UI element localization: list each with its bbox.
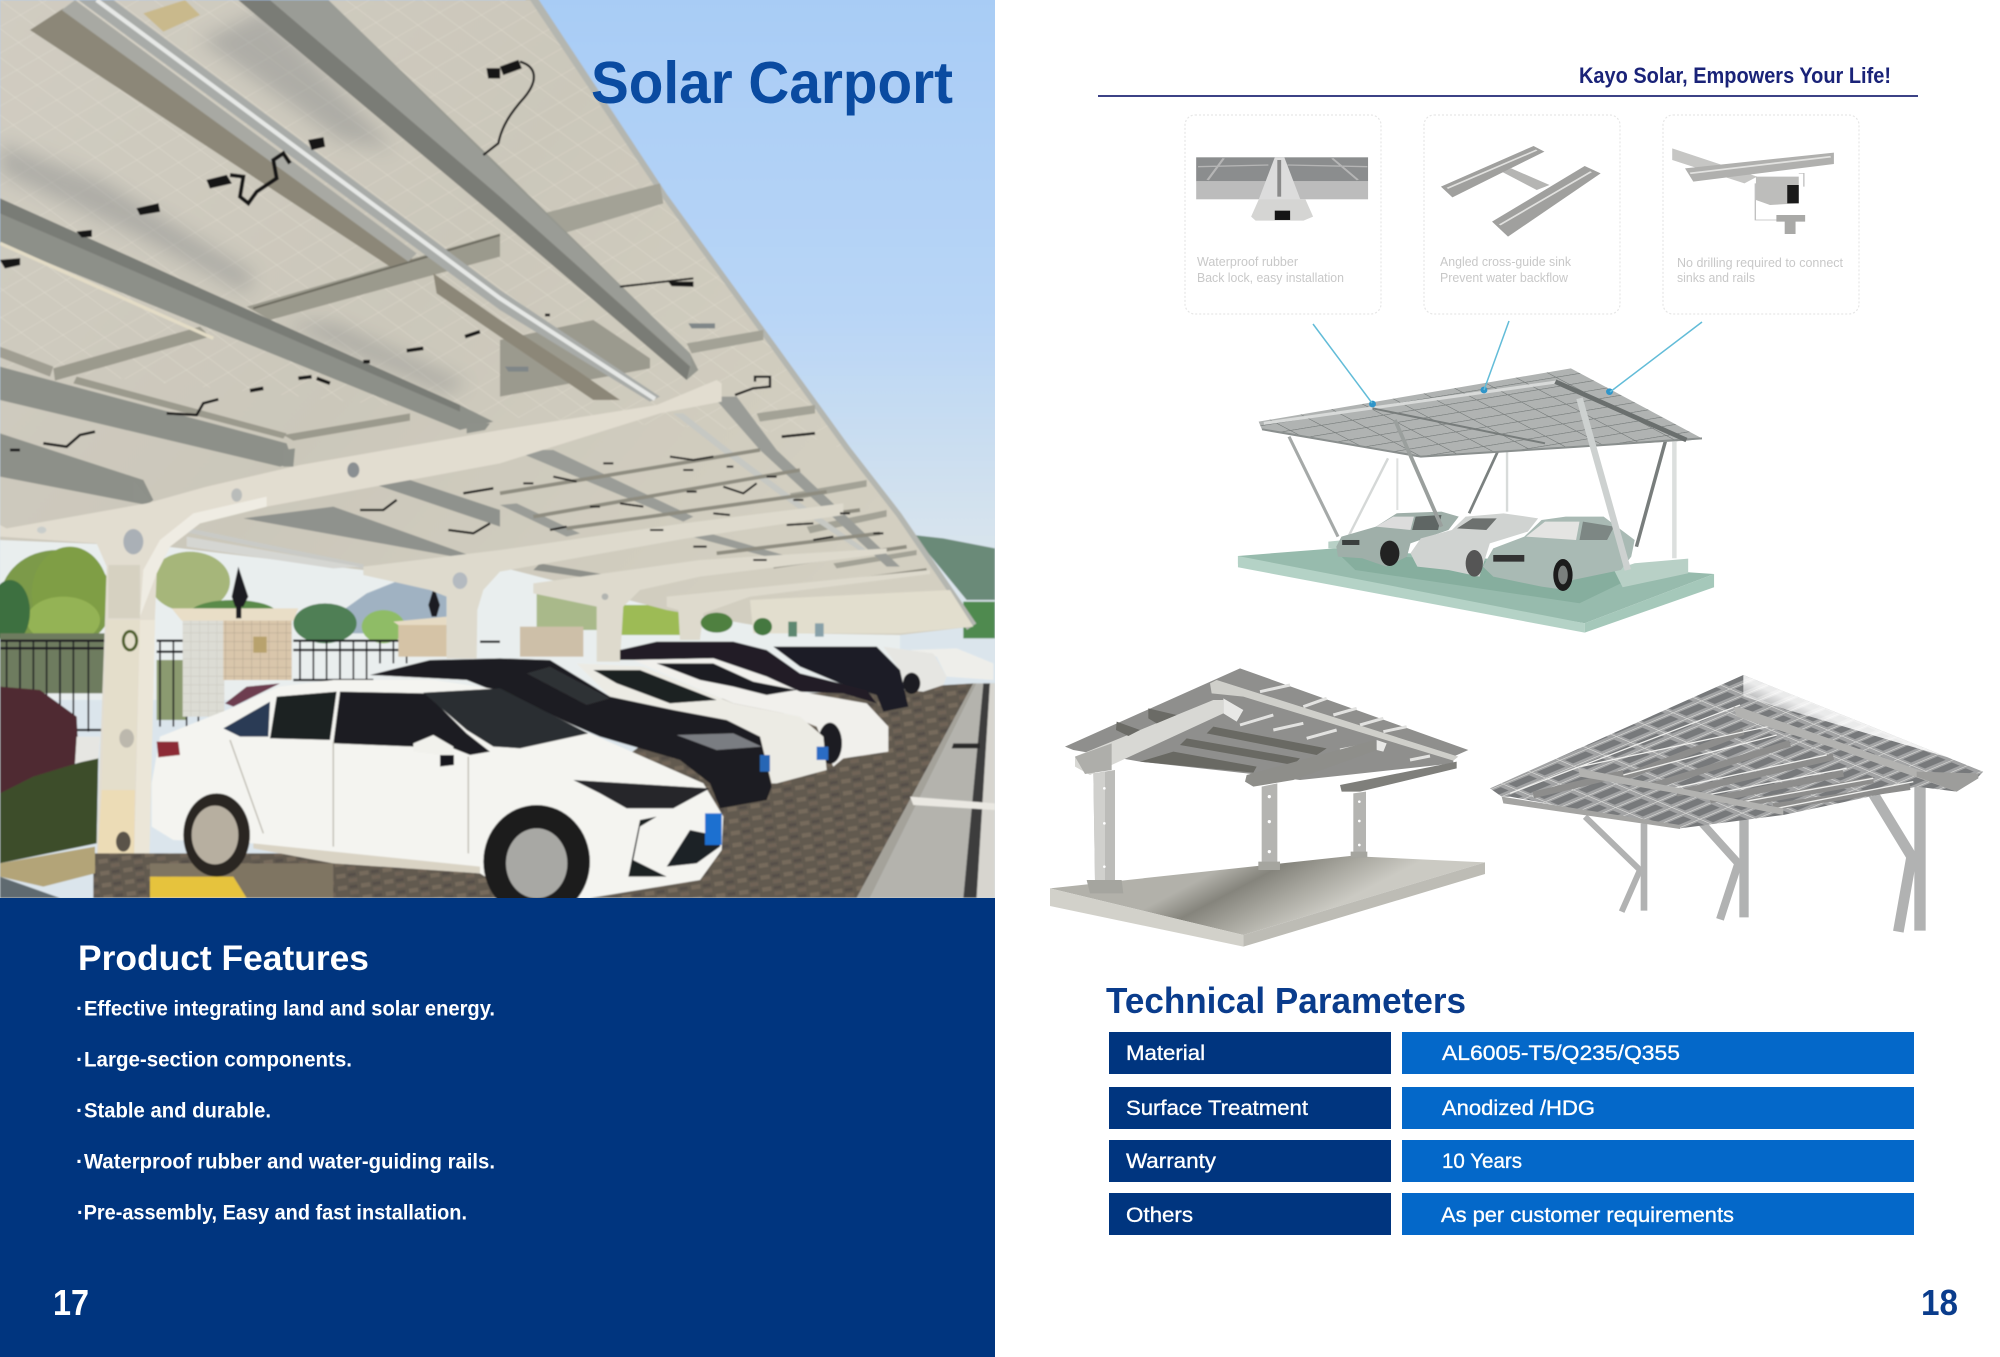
carport render on concrete slab	[1050, 668, 1485, 947]
caption: No drilling required to connect	[1677, 256, 1844, 270]
panel: carport photo	[0, 0, 1020, 920]
fence and gate pillars	[0, 567, 500, 732]
junction boxes and cables	[0, 60, 883, 560]
Y-shaped columns	[1585, 758, 1920, 932]
distant hills and trees	[0, 533, 995, 720]
main white frame	[0, 380, 722, 898]
feature list: ·	[76, 996, 83, 1020]
row: surface treatment: Surface Treatment	[1126, 1096, 1308, 1120]
panel labels on roof	[143, 0, 200, 32]
row: others: As per customer requirements	[1441, 1203, 1734, 1227]
panel: product features	[0, 898, 995, 1357]
caption	[1197, 255, 1344, 285]
columns	[1087, 770, 1367, 893]
row: others	[1109, 1193, 1914, 1235]
feature list	[76, 996, 495, 1224]
row: warranty	[1109, 1140, 1914, 1182]
feature list: Stable and durable.	[84, 1098, 271, 1122]
feature list: ·	[76, 1150, 83, 1174]
row: surface treatment	[1109, 1087, 1914, 1129]
far arches	[602, 593, 824, 637]
steel portal frames	[363, 503, 973, 662]
caption: Waterproof rubber	[1197, 255, 1298, 269]
row: others: Others	[1126, 1203, 1193, 1227]
roof	[1259, 368, 1702, 457]
icon: waterproof rubber joint	[1196, 157, 1368, 221]
title: Solar Carport	[591, 50, 953, 116]
heading: technical parameters: Technical Parameters	[1106, 980, 1466, 1021]
caption	[1440, 255, 1572, 285]
caption: Back lock, easy installation	[1197, 271, 1344, 285]
caption	[1677, 256, 1844, 285]
feature list: ·Pre-assembly, Easy and fast installation.	[77, 1200, 467, 1224]
row: material: AL6005-T5/Q235/Q355	[1442, 1041, 1680, 1065]
arrow: callout lines to roof	[1313, 321, 1702, 403]
ground slab	[1238, 540, 1714, 633]
feature list: Waterproof rubber and water-guiding rails.	[84, 1150, 495, 1174]
caption: sinks and rails	[1677, 271, 1755, 285]
dark car	[370, 658, 772, 808]
roof	[1490, 675, 1983, 829]
heading: product features: Product Features	[78, 939, 369, 978]
page number 18: 18	[1921, 1282, 1958, 1323]
panel smudges	[0, 10, 467, 393]
row: warranty: 10 Years	[1442, 1149, 1522, 1173]
icon: angled cross-guide sink	[1441, 146, 1601, 237]
row: material: Material	[1126, 1041, 1205, 1065]
carport render with cars	[1238, 368, 1714, 633]
front poles	[1395, 398, 1628, 570]
concrete slab	[1050, 856, 1485, 947]
distant cars	[577, 642, 993, 783]
panel: detail card 2	[1424, 115, 1620, 314]
table: technical parameters	[1109, 1032, 1914, 1235]
pavement	[0, 683, 995, 898]
panel: detail card 1	[1185, 115, 1381, 314]
steel beams	[0, 0, 927, 587]
white car	[152, 680, 723, 918]
feature list: Effective integrating land and solar energy.	[84, 996, 495, 1020]
feature list: ·	[76, 1048, 83, 1072]
row: warranty: Warranty	[1126, 1149, 1216, 1173]
roof	[1065, 668, 1468, 792]
caption: Angled cross-guide sink	[1440, 255, 1572, 269]
feature list: ·	[76, 1098, 83, 1122]
bushes	[0, 687, 100, 863]
cars	[1336, 512, 1635, 591]
icon: connector without drilling	[1672, 148, 1834, 234]
row: material	[1109, 1032, 1914, 1074]
slogan: Kayo Solar, Empowers Your Life!	[1579, 63, 1891, 88]
carport render with Y-shaped columns	[1490, 675, 1983, 932]
page number 17: 17	[53, 1282, 89, 1323]
feature list: Large-section components.	[84, 1048, 352, 1072]
row: surface treatment: Anodized /HDG	[1442, 1096, 1595, 1120]
markers	[1369, 387, 1613, 407]
roof panels	[0, 0, 972, 635]
rear poles	[1289, 437, 1674, 558]
roof edge flange	[530, 0, 972, 627]
caption: Prevent water backflow	[1440, 271, 1569, 285]
panel: detail card 3	[1663, 115, 1859, 314]
